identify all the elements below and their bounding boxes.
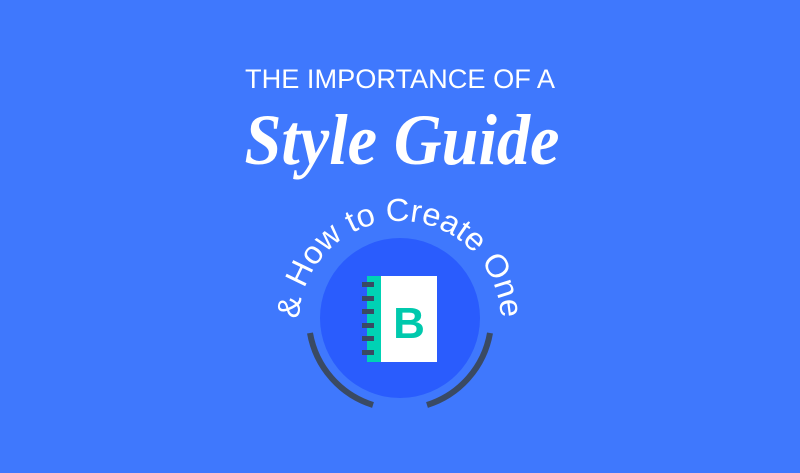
title: the importance of a: THE IMPORTANCE OF A: [245, 64, 555, 94]
icon: notebook: B: [393, 299, 425, 348]
text: & How to Create One: [278, 198, 518, 318]
arc bracket: [310, 333, 490, 405]
icon circle: [320, 238, 480, 398]
title: style guide: Style Guide: [244, 100, 560, 180]
icon: notebook: [362, 276, 437, 362]
